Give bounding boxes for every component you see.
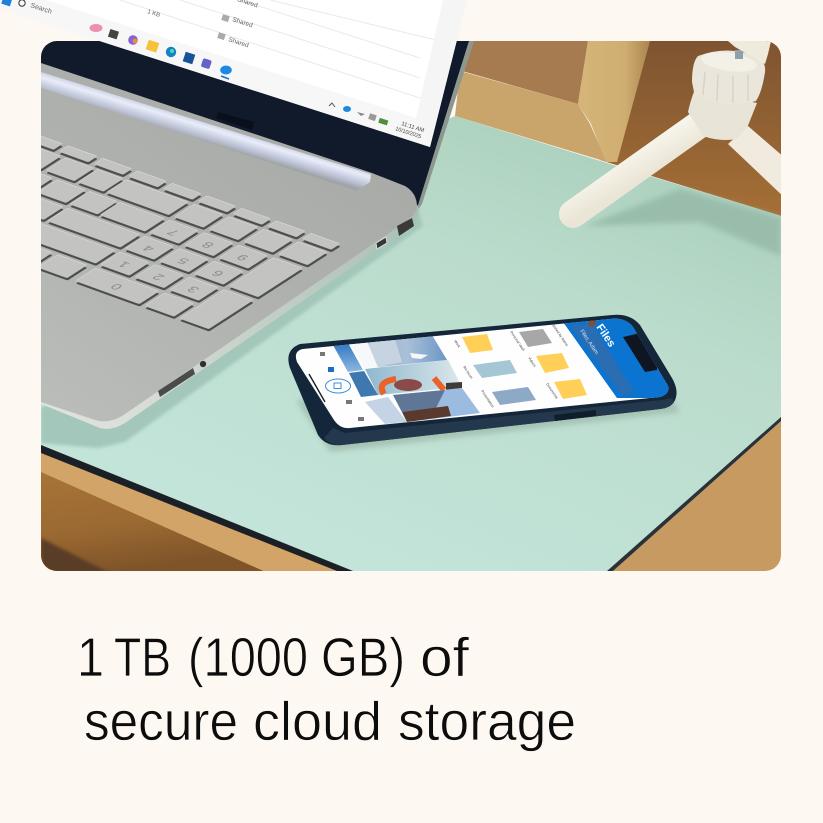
folder: Work <box>462 334 493 353</box>
document thumbnail: blue <box>473 360 517 378</box>
tripod knob ribs <box>703 72 748 103</box>
title line 1: TB <box>114 626 171 688</box>
tripod <box>573 41 785 214</box>
avatar <box>588 319 596 327</box>
phone screen <box>290 314 680 435</box>
search box <box>570 324 634 395</box>
screen right panel <box>416 0 467 147</box>
title line 1: 1 <box>77 626 104 688</box>
tray battery <box>378 118 388 125</box>
green desk mat <box>41 116 781 571</box>
title line 2: storage <box>398 690 576 752</box>
taskbar icons <box>90 24 232 79</box>
wooden wall behind frame <box>600 41 781 216</box>
taskbar <box>0 0 430 147</box>
icon: OneDrive cloud <box>220 66 232 74</box>
picture frame vertical bar <box>578 41 650 162</box>
search label: Search <box>29 2 53 16</box>
bottom navigation <box>320 352 364 421</box>
key legends <box>111 230 248 292</box>
shared icons <box>217 14 230 40</box>
search icon <box>19 0 25 6</box>
icon: edge <box>166 47 176 57</box>
active indicator <box>221 76 229 79</box>
USB-A port <box>397 218 414 236</box>
cork board <box>460 41 588 104</box>
tripod left leg <box>573 126 697 214</box>
tray volume <box>368 113 377 121</box>
size label: 1 KB <box>146 9 161 19</box>
tripod thumb plate <box>728 41 771 64</box>
mat dark edge: left <box>41 445 353 573</box>
clock: 11:11 AM <box>400 121 425 134</box>
phone side button <box>554 410 596 421</box>
shared labels: Shared <box>231 16 254 29</box>
shared labels: Shared <box>227 36 250 49</box>
title line 1: GB) <box>321 626 405 688</box>
desk light edge <box>41 450 351 573</box>
screen file rows <box>120 0 436 98</box>
laptop deck <box>41 63 417 421</box>
icon: lotus <box>90 24 102 32</box>
camera button <box>326 379 350 393</box>
wood desk: lower left <box>41 450 351 573</box>
icon: dark app <box>108 29 119 39</box>
laptop lid edge <box>416 41 474 212</box>
folder: Documents <box>554 379 587 399</box>
keyboard keys <box>41 136 340 332</box>
file labels <box>453 323 569 408</box>
photo: sky with plane <box>367 335 447 367</box>
folder: Videos <box>536 353 569 373</box>
nav icons <box>320 352 325 356</box>
notch <box>623 333 657 372</box>
white screen surface <box>0 0 467 147</box>
title line 2: secure <box>84 690 238 752</box>
webcam hinge notch <box>216 112 254 130</box>
mat dark edge: right <box>607 417 781 571</box>
icon: file explorer <box>146 40 159 53</box>
laptop base <box>0 41 474 429</box>
blue header <box>563 314 672 398</box>
phone title: Files <box>594 322 617 349</box>
desk front face <box>41 472 268 573</box>
tripod collar <box>688 89 757 140</box>
tray caret <box>329 103 335 107</box>
photo: snowy mountain <box>393 388 480 422</box>
title line 1: (1000 <box>188 626 308 688</box>
tripod right leg <box>728 126 781 194</box>
file labels: Presentation <box>480 389 495 408</box>
tripod knurled head <box>692 50 765 105</box>
document thumbnail: book <box>492 387 536 405</box>
title <box>77 626 576 752</box>
photo: orange life ring <box>365 360 462 395</box>
file labels: Documents <box>545 382 559 400</box>
picture frame horizontal bar <box>455 71 607 162</box>
file labels: Sorted by Name <box>551 323 569 347</box>
file labels: Work <box>453 339 461 349</box>
photo strip: blue upper <box>333 343 363 372</box>
shared labels <box>227 0 259 49</box>
home indicator <box>309 374 325 402</box>
laptop bezel <box>41 41 469 212</box>
phone shadow <box>296 395 680 452</box>
audio jack <box>199 360 207 368</box>
icon: store <box>183 52 195 64</box>
title line 1: of <box>420 626 470 688</box>
tray wifi <box>357 112 365 116</box>
file labels: Re-focus <box>462 365 474 380</box>
title line 2: cloud <box>253 690 382 752</box>
file labels: Videos <box>527 356 537 368</box>
laptop shadow on mat <box>41 205 423 448</box>
photo: white left of plane photo <box>348 341 378 368</box>
icon: teams <box>201 58 212 69</box>
system tray <box>329 103 425 140</box>
hinge bar highlight <box>41 72 371 191</box>
tripod shadow <box>585 189 781 256</box>
smartphone <box>288 314 680 445</box>
date: 10/10/2025 <box>394 126 422 140</box>
tray cloud <box>343 106 351 112</box>
icon: copilot <box>128 35 138 45</box>
laptop screen <box>0 0 467 147</box>
file labels: Personal Vault <box>509 330 525 352</box>
phone body <box>288 315 677 445</box>
phone side shading <box>324 398 674 445</box>
photo panel: desk scene <box>0 41 785 573</box>
folder: Personal Vault <box>519 329 552 347</box>
photo: small snowy <box>365 397 407 424</box>
search text: Files, Adam <box>578 329 600 356</box>
laptop side edge <box>41 205 418 429</box>
tripod knob top <box>702 52 756 72</box>
USB-C port <box>376 237 387 249</box>
photo strip: blue lower <box>349 371 378 397</box>
wood desk: lower right <box>613 421 781 571</box>
SD card slot <box>158 368 195 397</box>
desk dark shadow <box>41 538 110 573</box>
tripod screw <box>735 50 743 59</box>
start icon <box>1 0 12 6</box>
